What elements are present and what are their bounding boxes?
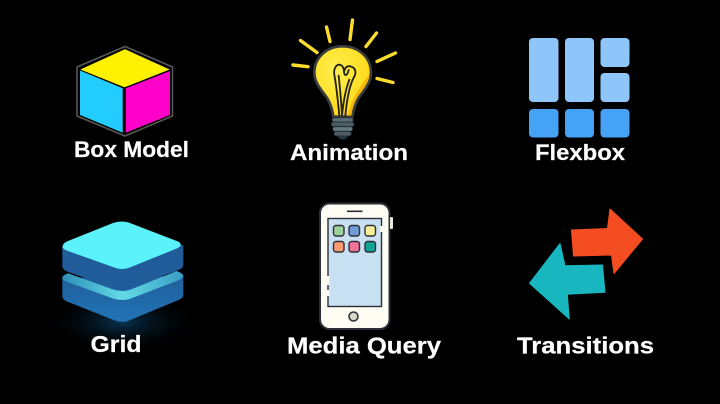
upper layer side	[62, 245, 183, 290]
bulb base	[331, 118, 354, 139]
icon: transitions arrows	[530, 209, 642, 319]
label: Flexbox: Flexbox	[535, 140, 626, 165]
arrow: right red	[572, 209, 642, 274]
filament	[334, 65, 355, 116]
label: Animation: Animation	[290, 140, 408, 165]
arrow: left teal	[530, 244, 605, 319]
icon: box model cube	[77, 46, 172, 136]
glow under layers	[44, 292, 200, 352]
icon: grid stacked layers	[44, 222, 200, 352]
icon: phone	[320, 204, 393, 329]
icon: light bulb	[293, 20, 396, 139]
app icons	[334, 226, 376, 252]
bulb glass	[314, 46, 371, 117]
icon rays	[293, 20, 396, 82]
label: Grid: Grid	[90, 331, 142, 357]
screen edge gaps	[327, 226, 383, 296]
icon: flexbox layout	[529, 38, 630, 138]
label: Box Model: Box Model	[74, 137, 189, 162]
label: Transitions: Transitions	[517, 332, 654, 358]
upper layer top	[62, 222, 181, 269]
bulb shadow	[348, 73, 369, 116]
label: Media Query: Media Query	[287, 332, 441, 358]
home button	[349, 312, 358, 321]
phone screen	[328, 218, 382, 306]
lower layer side	[62, 276, 183, 322]
lower layer strip	[62, 271, 183, 300]
